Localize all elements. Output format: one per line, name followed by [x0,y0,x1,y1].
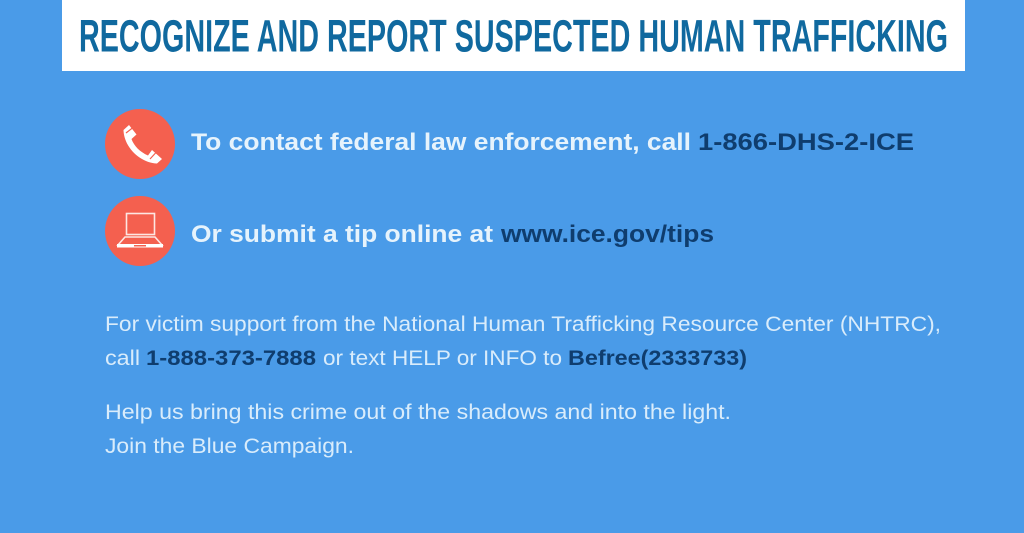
icon: laptop [105,196,175,266]
phone contact line: To contact federal law enforcement, call [191,129,691,156]
victim support text: 1-888-373-7888 [146,347,316,370]
victim support text: Befree(2333733) [568,347,747,370]
title banner [62,0,965,71]
icon: phone [105,109,175,179]
call to action text [105,401,731,458]
victim support text [105,313,941,370]
victim support text: or text HELP or INFO to [323,347,562,370]
phone contact line: 1-866-DHS-2-ICE [698,129,914,156]
victim support text: call [105,347,140,370]
online tip line: Or submit a tip online at [191,221,493,248]
victim support text: For victim support from the National Human Trafficking Resource Center (NHTRC), [105,313,941,336]
call to action text: Help us bring this crime out of the shadows and into the light. [105,401,731,424]
call to action text: Join the Blue Campaign. [105,435,354,458]
online tip line: www.ice.gov/tips [500,221,714,248]
